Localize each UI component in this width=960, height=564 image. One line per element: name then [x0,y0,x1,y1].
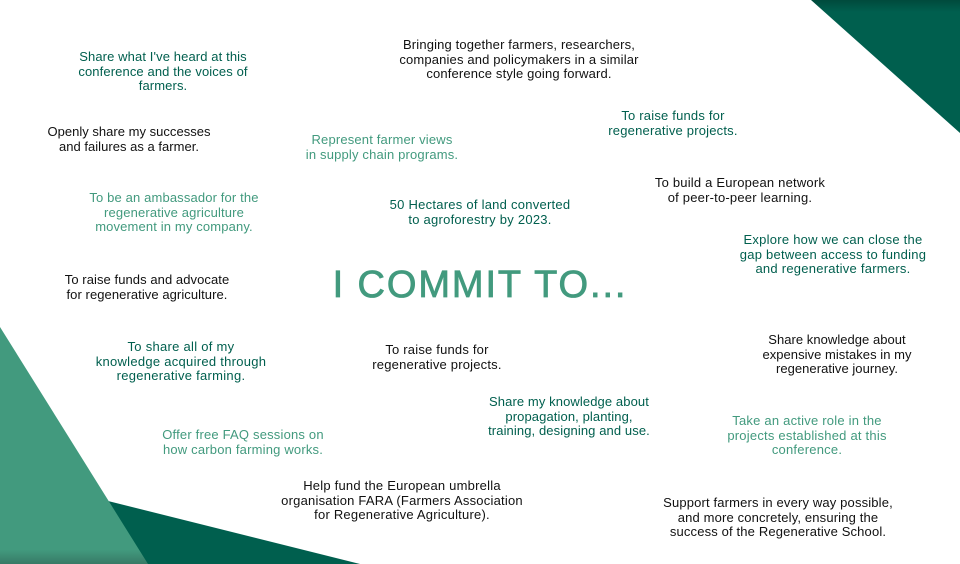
commitment: regenerative school: and more concretely, ensuring the [678,510,878,524]
commitment: openly share: and failures as a farmer. [59,138,199,154]
commitment: represent farmer views [306,132,458,162]
commitment: share knowledge: To share all of my [128,339,234,354]
commitment: propagation: Share my knowledge about [489,394,649,409]
commitment: 50 hectares: 50 Hectares of land converted [390,197,570,212]
commitment: close the gap [740,232,926,276]
commitment: raise funds and advocate: for regenerative agriculture. [66,286,228,302]
commitment: FARA: Help fund the European umbrella [303,478,501,493]
title: I COMMIT TO... [333,264,627,306]
commitment: bringing together [399,37,639,81]
commitment: raise funds top [608,108,738,138]
commitment: represent farmer views: Represent farmer views [311,132,452,147]
commitment: bringing together: Bringing together farmers, researchers, [403,37,635,52]
commitment: regenerative school: success of the Regenerative School. [670,524,886,539]
commitment: active role [727,413,887,457]
commitment: raise funds top: regenerative projects. [608,122,738,138]
commitment: share knowledge [96,339,266,383]
commitment: raise funds centre [372,342,502,372]
commitment: share voices: Share what I've heard at this [79,49,247,64]
commitment: raise funds centre: To raise funds for [385,342,489,357]
commitment: 50 hectares: to agroforestry by 2023. [408,212,552,226]
commitment: close the gap: Explore how we can close the [744,232,922,247]
commitment: raise funds and advocate [65,272,229,302]
commitment: represent farmer views: in supply chain programs. [306,146,458,162]
triangle: top right [811,0,960,133]
commitment: expensive mistakes [762,332,912,376]
commitment: European network [655,175,825,204]
commitment: ambassador: To be an ambassador for the [89,190,259,205]
commitment: raise funds top: To raise funds for [621,108,725,123]
commitment: bringing together: companies and policymakers in a similar [399,52,639,66]
commitment: FARA [281,478,523,522]
commitment: 50 hectares [390,197,570,226]
commitment: raise funds and advocate: To raise funds and advocate [65,272,229,287]
commitment: close the gap: gap between access to funding [740,246,926,262]
commitment: active role: projects established at this [727,428,887,442]
commitment: propagation: training, designing and use. [488,423,650,438]
commitment: propagation [488,394,650,438]
commitment: share voices [78,49,248,93]
commitment: openly share [47,124,211,154]
commitment: propagation: propagation, planting, [505,408,633,424]
commitment: raise funds centre: regenerative projects. [372,356,502,372]
triangle: bottom left [0,327,148,564]
commitment: ambassador [89,190,259,234]
commitment: active role: conference. [772,442,842,457]
commitment: ambassador: movement in my company. [95,219,253,234]
commitment: regenerative school: Support farmers in every way possible, [663,495,893,510]
commitment: FAQ sessions: how carbon farming works. [163,442,323,456]
commitment: expensive mistakes: Share knowledge about [768,332,906,347]
commitment: share knowledge: knowledge acquired through [96,354,266,368]
commitment: FARA: organisation FARA (Farmers Association [281,492,523,508]
commitment: expensive mistakes: expensive mistakes in my [762,346,912,362]
commitment: ambassador: regenerative agriculture [104,204,244,220]
commitment: expensive mistakes: regenerative journey. [776,361,898,376]
commitment: regenerative school [663,495,893,539]
commitment: close the gap: and regenerative farmers. [755,261,911,276]
commitment: openly share: Openly share my successes [47,124,211,139]
commitment: European network: To build a European network [655,175,825,190]
commitment: share voices: farmers. [139,78,187,93]
commitment: FAQ sessions [162,427,324,456]
commitment: share voices: conference and the voices of [78,64,248,78]
commitment: European network: of peer-to-peer learning. [668,190,812,204]
commitment: bringing together: conference style going forward. [426,66,612,81]
commitment: FARA: for Regenerative Agriculture). [314,507,490,522]
commitment: active role: Take an active role in the [732,413,882,428]
triangle: bottom dark [108,501,360,564]
commitment: FAQ sessions: Offer free FAQ sessions on [162,427,324,442]
commitment: share knowledge: regenerative farming. [117,368,245,383]
